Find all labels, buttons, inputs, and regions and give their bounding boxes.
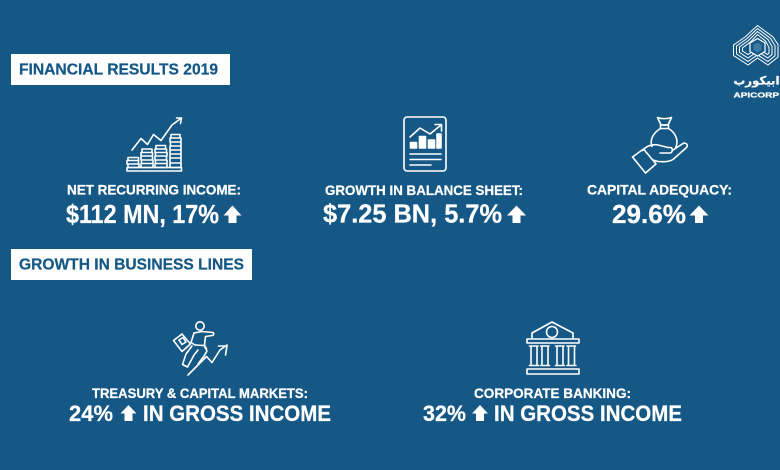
icon: up arrow [507, 206, 526, 223]
heading: growth in business lines: GROWTH IN BUSINESS LINES [19, 256, 244, 274]
icon: report document [404, 117, 446, 171]
panel: corporate banking [423, 322, 682, 426]
logo: APICORP: APICORP [734, 90, 779, 100]
icon: businessman running up arrow [174, 322, 227, 375]
label: GROWTH IN BALANCE SHEET: [325, 182, 523, 198]
icon: rising coin stacks [127, 118, 182, 171]
heading: financial results 2019: FINANCIAL RESULTS 2019 [19, 62, 218, 78]
panel: capital adequacy [587, 118, 732, 229]
icon: up arrow [120, 405, 136, 421]
logo: APICORP [734, 26, 780, 100]
value: $7.25 BN, 5.7% [323, 198, 502, 228]
icon: up arrow [690, 206, 708, 223]
panel: growth in balance sheet [323, 117, 526, 228]
label: CAPITAL ADEQUACY: [587, 182, 732, 198]
panel: treasury and capital markets [69, 322, 331, 426]
value text: IN GROSS INCOME [143, 401, 331, 426]
label: NET RECURRING INCOME: [67, 182, 241, 198]
heading: growth in business lines [11, 249, 252, 280]
label: CORPORATE BANKING: [474, 385, 631, 401]
icon: bank building [527, 322, 579, 374]
label: TREASURY & CAPITAL MARKETS: [92, 385, 308, 401]
icon: up arrow [224, 206, 242, 223]
value: 24% [69, 401, 113, 426]
value: $112 MN, 17% [66, 199, 219, 229]
icon: hand holding money bag [632, 118, 687, 173]
value text: IN GROSS INCOME [494, 401, 682, 426]
icon: up arrow [472, 405, 488, 421]
value: 32% [423, 401, 466, 426]
value: 29.6% [612, 199, 686, 229]
logo: APICORP: ابيكورب [734, 76, 780, 88]
heading: financial results 2019 [11, 54, 230, 85]
panel: net recurring income [66, 118, 242, 229]
